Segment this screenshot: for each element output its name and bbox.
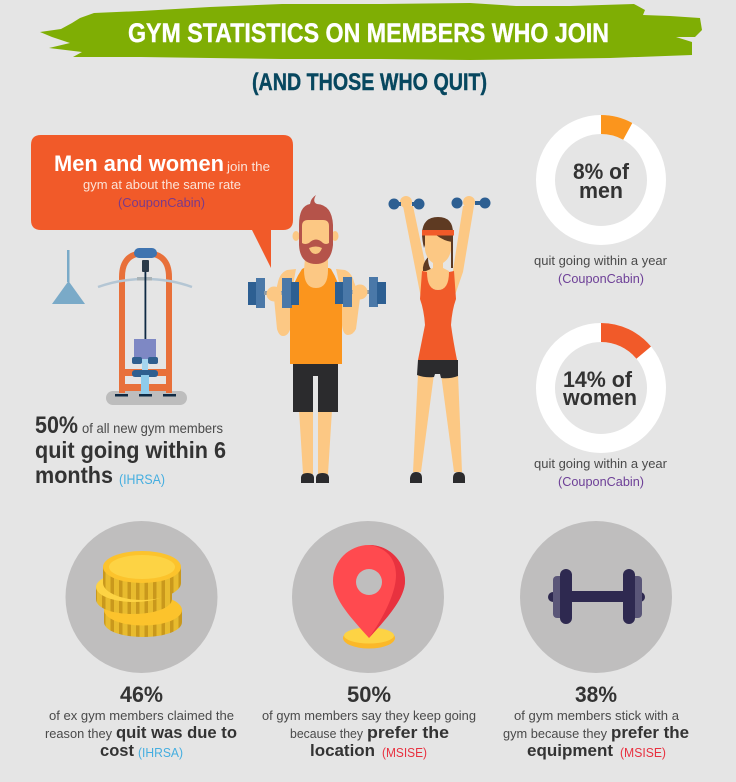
stat: 50% location: because they <box>290 726 363 741</box>
man: hair and beard <box>299 195 333 264</box>
man: arms <box>274 269 360 336</box>
callout: men and women: Men and women <box>54 151 224 176</box>
callout: men and women: (CouponCabin) <box>118 195 205 210</box>
man: right dumbbell <box>335 277 386 307</box>
label: 14% of women source <box>534 456 668 489</box>
man: legs <box>299 410 332 474</box>
man: tank top <box>290 268 342 364</box>
donut: 14% of women <box>546 323 656 444</box>
woman: neck and chest <box>426 258 449 290</box>
stat: 46% cost: (IHRSA) <box>138 745 183 760</box>
woman: arms <box>400 196 475 300</box>
stat: 50% quit within 6 months: (IHRSA) <box>119 471 165 487</box>
stat: 50% quit within 6 months: of all new gym members <box>82 420 223 436</box>
stat: 46% cost: quit was due to <box>116 723 237 742</box>
woman: shorts <box>417 360 458 378</box>
man: left dumbbell <box>248 278 299 308</box>
stat: 46% cost: reason they <box>45 726 112 741</box>
woman: headband <box>422 230 454 236</box>
stat: 38% equipment <box>503 682 689 760</box>
stat: 38% equipment: gym because they <box>503 726 607 741</box>
title banner <box>40 3 702 60</box>
woman: ponytail and hair back <box>422 217 453 268</box>
stat: 46% cost: cost <box>100 741 134 760</box>
donut: 8% of men: men <box>579 178 623 203</box>
stat: 50% quit within 6 months: 50% <box>35 412 78 439</box>
label: 14% of women source: quit going within a year <box>534 456 668 471</box>
top coin <box>103 551 181 600</box>
woman: face <box>425 235 451 265</box>
donut: 8% of men: 8% of <box>573 159 630 184</box>
callout: men and women <box>31 135 293 268</box>
lower coin <box>104 594 182 637</box>
woman: shoes <box>410 472 465 483</box>
title banner: GYM STATISTICS ON MEMBERS WHO JOIN <box>128 18 609 48</box>
callout: men and women: gym at about the same rate <box>83 177 241 192</box>
stat: 38% equipment: of gym members stick with a <box>514 708 680 723</box>
stat: 50% location: prefer the <box>367 723 449 742</box>
icon: dumbbell <box>520 521 672 673</box>
man: ears <box>292 231 338 241</box>
label: 14% of women source: (CouponCabin) <box>558 474 644 489</box>
stat: 50% location: of gym members say they keep going <box>262 708 476 723</box>
stat: 46% cost <box>45 682 237 760</box>
man: shoes <box>301 473 329 483</box>
icon: hanging lamp <box>52 250 85 304</box>
icon: gym machine <box>98 248 192 405</box>
man: mouth <box>309 246 322 254</box>
middle coin <box>96 572 172 614</box>
donut: 8% of men <box>546 115 656 236</box>
man: face <box>302 220 329 244</box>
donut: 14% of women: 14% of <box>563 367 633 392</box>
illustration: man with dumbbells <box>248 195 386 483</box>
subtitle: (AND THOSE WHO QUIT) <box>252 69 487 96</box>
stat: 50% quit within 6 months: quit going within 6 <box>35 437 226 463</box>
stat: 50% quit within 6 months <box>35 412 226 488</box>
stat: 38% equipment: 38% <box>575 682 617 707</box>
icon: location pin <box>292 521 444 673</box>
man: shorts <box>293 364 338 412</box>
stat: 46% cost: of ex gym members claimed the <box>49 708 234 723</box>
label: 8% of men source <box>534 253 668 286</box>
woman: tank top <box>418 271 457 360</box>
label: 8% of men source: (CouponCabin) <box>558 271 644 286</box>
stat: 50% location: location <box>310 741 375 760</box>
woman: legs <box>413 374 462 472</box>
stat: 38% equipment: (MSISE) <box>620 745 666 760</box>
stat: 46% cost: 46% <box>120 682 163 707</box>
callout: men and women: join the <box>226 159 270 174</box>
woman: side bang <box>436 235 453 242</box>
icon: coins <box>66 521 218 673</box>
stat: 50% location <box>262 682 476 760</box>
stat: 38% equipment: equipment <box>527 741 613 760</box>
woman: dumbbells <box>388 198 490 210</box>
illustration: woman with dumbbells <box>388 196 490 483</box>
label: 8% of men source: quit going within a year <box>534 253 668 268</box>
stat: 50% location: (MSISE) <box>382 745 427 760</box>
stat: 50% quit within 6 months: months <box>35 462 113 488</box>
stat: 38% equipment: prefer the <box>611 723 689 742</box>
donut: 14% of women: women <box>562 385 637 410</box>
stat: 50% location: 50% <box>347 682 391 707</box>
man: neck and chest <box>304 258 328 288</box>
